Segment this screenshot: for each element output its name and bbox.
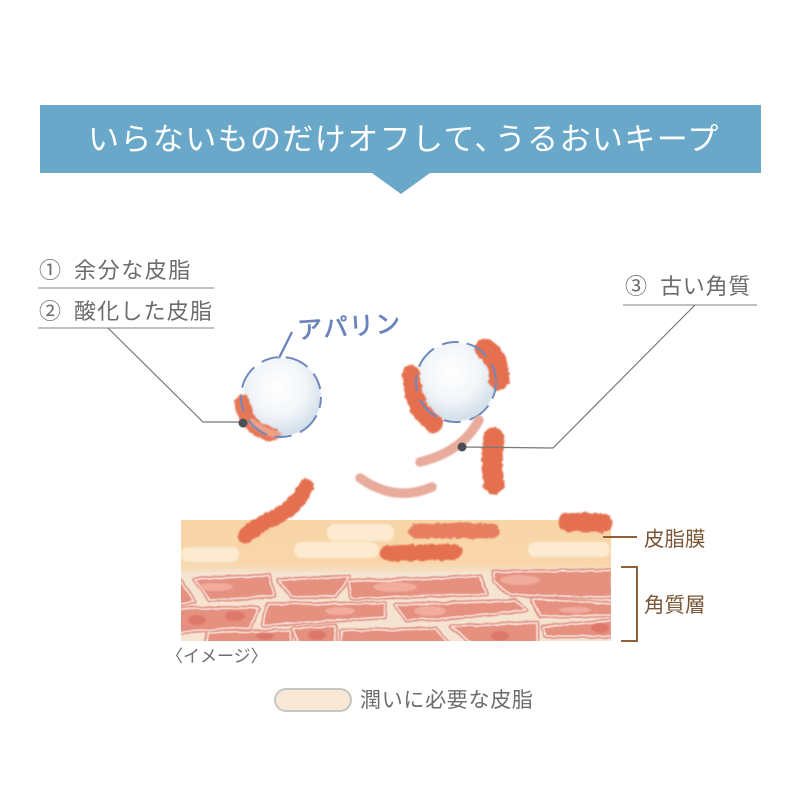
callout: label 3: ③ (625, 274, 647, 299)
legend: 潤いに必要な皮脂 (360, 689, 534, 712)
image note: 〈イメージ〉 (166, 647, 268, 666)
falling sebum pieces (246, 438, 494, 536)
skin cross section (179, 520, 612, 645)
sebum film layer (181, 520, 611, 575)
apalin label (277, 310, 402, 362)
old keratin flakes (360, 420, 479, 493)
leader lines and dots (108, 305, 695, 452)
layer labels with brackets (603, 528, 706, 641)
callout: label 3: 古い角質 (660, 274, 751, 299)
legend (275, 689, 534, 712)
callout: labels 1 and 2: ② (39, 299, 61, 324)
layer labels with brackets: 皮脂膜 (644, 528, 706, 551)
callout: labels 1 and 2: ① (39, 258, 61, 283)
apalin label: アパリン (296, 310, 402, 345)
layer labels with brackets: 角質層 (644, 594, 706, 617)
title: いらないものだけオフして、うるおいキープ (88, 122, 720, 157)
sebum on skin surface (388, 522, 603, 553)
title banner (40, 105, 761, 194)
callout: label 3 (623, 274, 757, 305)
callout: labels 1 and 2: 余分な皮脂 (74, 258, 192, 283)
right apalin ball with sebum (411, 342, 499, 424)
left apalin ball with sebum (241, 357, 321, 437)
stratum corneum layer (179, 571, 612, 645)
callout: labels 1 and 2 (38, 258, 214, 328)
callout: labels 1 and 2: 酸化した皮脂 (74, 299, 213, 324)
